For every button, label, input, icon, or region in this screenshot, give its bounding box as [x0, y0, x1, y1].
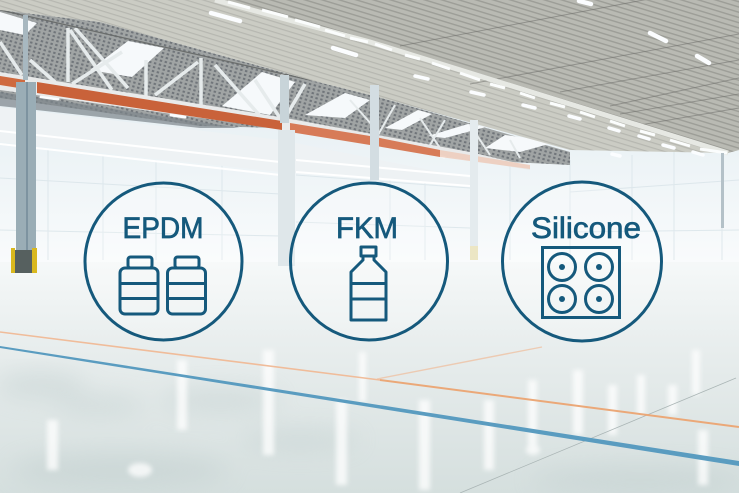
floor joint lines [460, 378, 736, 493]
background: roof truss zone [0, 10, 570, 165]
heading: Silicone: Silicone [531, 212, 641, 245]
background: columns [11, 15, 724, 273]
background: rear wall [0, 100, 739, 262]
heading: EPDM: EPDM [122, 212, 204, 245]
background: duct and white band under the beam [0, 92, 470, 186]
truss members [0, 28, 520, 158]
background: ceiling light strip [215, 0, 728, 153]
background: ceiling panels [0, 0, 739, 153]
blue floor line [0, 346, 739, 466]
skylights [0, 12, 556, 152]
badge: EPDM [85, 183, 242, 340]
badge: Silicone [502, 182, 662, 341]
icon: bottle [351, 247, 386, 320]
icon: plate with four rings [542, 248, 620, 318]
background: floor [0, 258, 739, 493]
background: red crane beam [0, 72, 530, 170]
orange floor line [0, 332, 739, 427]
background: ceiling lamps [41, 1, 709, 157]
heading: FKM: FKM [336, 212, 398, 245]
icon: two jars [120, 257, 206, 314]
badge: FKM [290, 183, 448, 340]
floor reflections [47, 350, 708, 490]
yellow column base [11, 248, 37, 273]
